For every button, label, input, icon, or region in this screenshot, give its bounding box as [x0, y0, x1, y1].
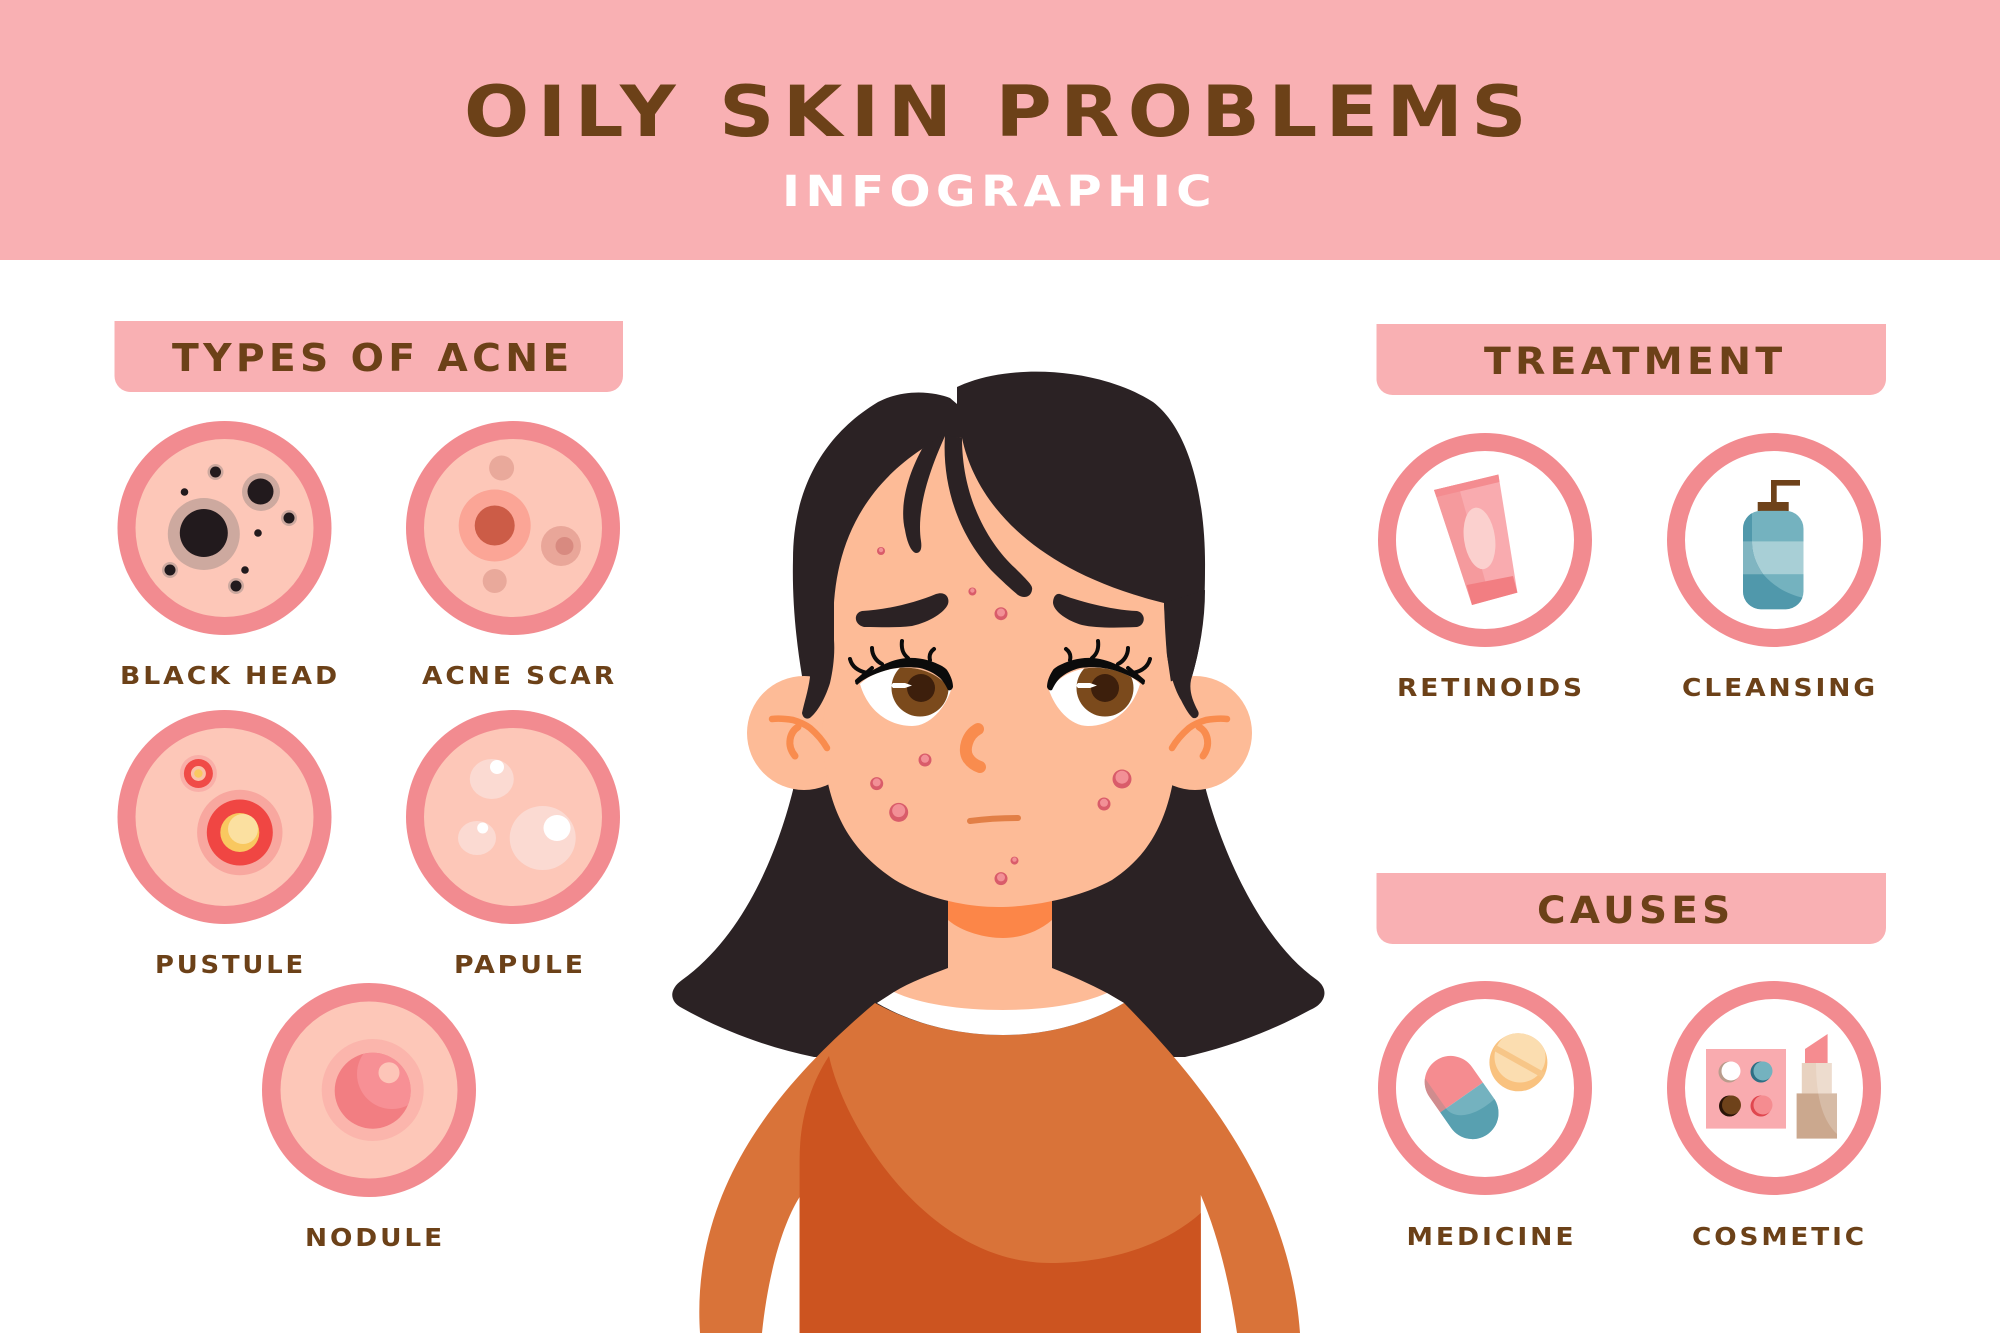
icon: cleansing bottle: [1676, 442, 1872, 638]
heading: causes: CAUSES: [1537, 889, 1734, 932]
label: retinoids: RETINOIDS: [1397, 673, 1585, 702]
neck shadow: [948, 895, 1052, 938]
label: pustule: PUSTULE: [155, 950, 306, 979]
nose: [966, 729, 980, 767]
left ear: [747, 676, 861, 790]
label: black head: BLACK HEAD: [120, 661, 340, 690]
label: cleansing: CLEANSING: [1682, 673, 1878, 702]
header banner: [0, 0, 2000, 260]
subtitle: INFOGRAPHIC: [782, 168, 1217, 217]
icon: medicine: [1387, 990, 1583, 1186]
label: papule: PAPULE: [454, 950, 586, 979]
panel: types of acne: [114, 321, 623, 1252]
icon: retinoids tube: [1387, 442, 1583, 638]
panel: treatment: [1376, 324, 1886, 702]
heading: treatment: [1376, 324, 1886, 395]
title: OILY SKIN PROBLEMS: [464, 71, 1535, 153]
collar: [877, 992, 1124, 1035]
neck: [877, 890, 1124, 1030]
pimples: [870, 547, 1132, 885]
right inner ear branch: [1199, 727, 1208, 756]
heading: treatment: TREATMENT: [1484, 340, 1786, 383]
right ear: [1138, 676, 1252, 790]
sweater shadow: [800, 1056, 1201, 1333]
face: [822, 436, 1178, 907]
label: cosmetic: COSMETIC: [1692, 1222, 1867, 1251]
left inner ear branch: [790, 727, 798, 756]
icon: acne scar: [406, 421, 620, 635]
hair strand center: [945, 435, 1032, 597]
label: medicine: MEDICINE: [1406, 1222, 1576, 1251]
heading: causes: [1376, 873, 1886, 944]
hair strand left: [903, 432, 945, 553]
right inner ear: [1172, 719, 1227, 748]
hair lock right: [1164, 590, 1205, 718]
hair back: [672, 372, 1324, 1057]
left inner ear: [772, 719, 827, 748]
icon: cosmetic: [1676, 990, 1872, 1186]
hair lock left: [798, 600, 834, 719]
icon: papule: [406, 710, 620, 924]
panel: causes: [1376, 873, 1886, 1251]
heading: types of acne: TYPES OF ACNE: [172, 336, 574, 380]
icon: pustule: [118, 710, 332, 924]
label: acne scar: ACNE SCAR: [422, 661, 617, 690]
sweater: [699, 1003, 1300, 1333]
left eyebrow: [856, 593, 948, 627]
right eyebrow: [1053, 594, 1144, 628]
label: nodule: NODULE: [305, 1223, 445, 1252]
icon: black head: [118, 421, 332, 635]
left eye: [850, 641, 953, 726]
mouth: [970, 818, 1018, 821]
icon: nodule: [262, 983, 476, 1197]
heading: types of acne: [114, 321, 623, 392]
right eye: [1047, 641, 1150, 726]
illustration: girl with acne: [672, 372, 1324, 1333]
